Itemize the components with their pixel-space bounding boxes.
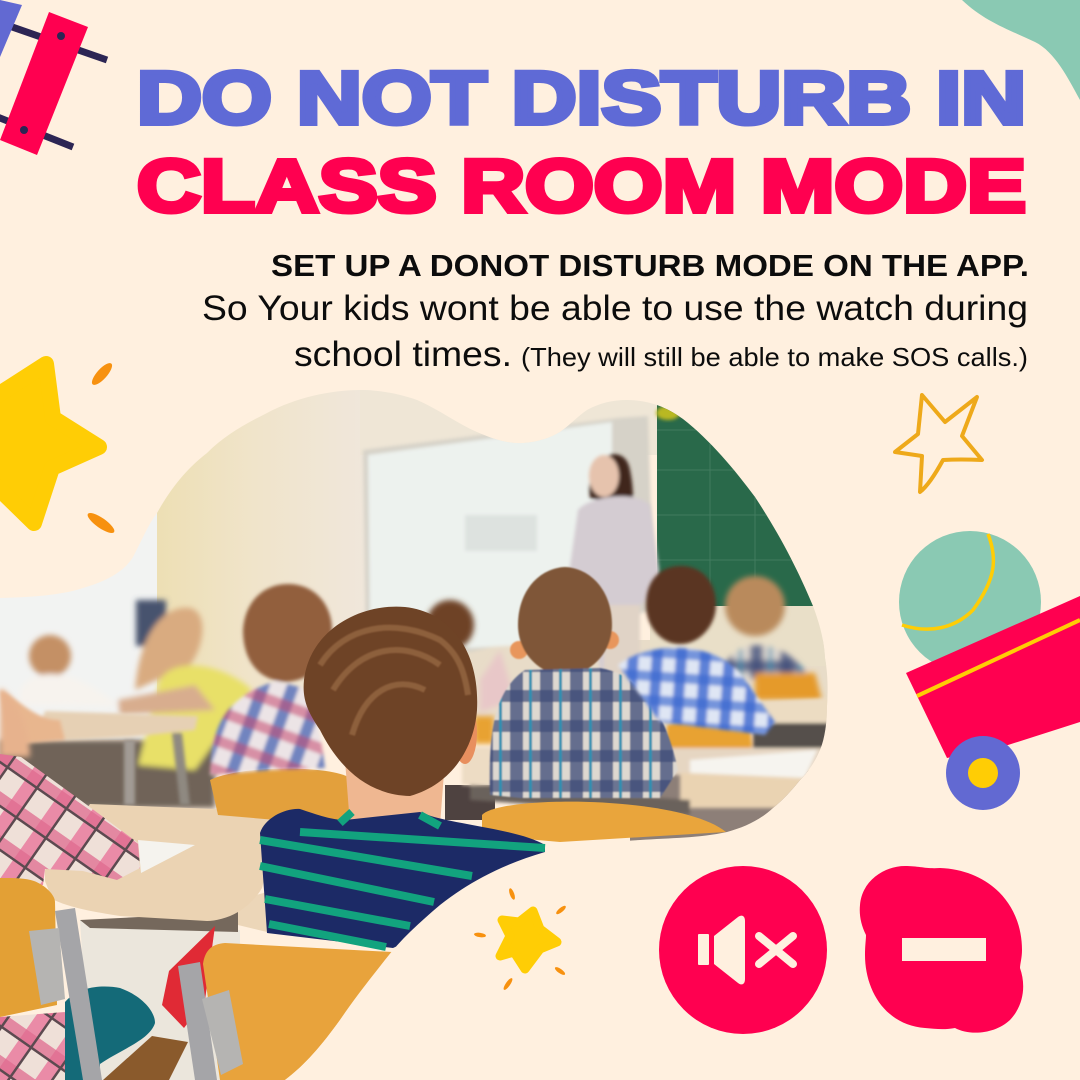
floor <box>80 920 240 1080</box>
teacher <box>568 454 662 675</box>
title <box>137 56 1026 228</box>
corner shape: teal <box>962 0 1080 100</box>
kid center <box>490 567 678 798</box>
icon: muted speaker <box>659 866 827 1034</box>
icon: ball and wagon <box>899 531 1080 810</box>
description text: (They will still be able to make SOS calls.) <box>521 342 1028 372</box>
icon: small yellow star with sparks <box>474 888 567 991</box>
icon: do not disturb rounded shape <box>860 866 1023 1033</box>
back desks <box>0 690 830 815</box>
pink plaid child <box>0 688 140 1080</box>
distant chairs <box>210 768 726 842</box>
title: CLASS ROOM MODE <box>137 144 1026 228</box>
front desks <box>45 804 290 932</box>
description text: school times. <box>294 335 512 374</box>
icon: xylophone <box>0 0 107 155</box>
description text: So Your kids wont be able to use the watch during <box>202 289 1028 328</box>
main boy <box>260 607 545 948</box>
whiteboard <box>363 416 654 652</box>
green chalkboard <box>650 405 823 640</box>
kid right <box>618 566 775 735</box>
photo: classroom <box>0 385 840 1080</box>
description text: SET UP A DONOT DISTURB MODE ON THE APP. <box>271 248 1029 283</box>
icon: outlined star <box>895 395 982 492</box>
background kids <box>0 576 822 808</box>
mid kids <box>210 566 775 798</box>
kid left of main boy <box>210 584 332 775</box>
icon: large yellow star <box>0 360 117 536</box>
description text <box>202 248 1029 374</box>
photo background wall and windows <box>0 385 830 845</box>
front chairs and bag <box>0 878 392 1080</box>
title: DO NOT DISTURB IN <box>137 56 1026 140</box>
